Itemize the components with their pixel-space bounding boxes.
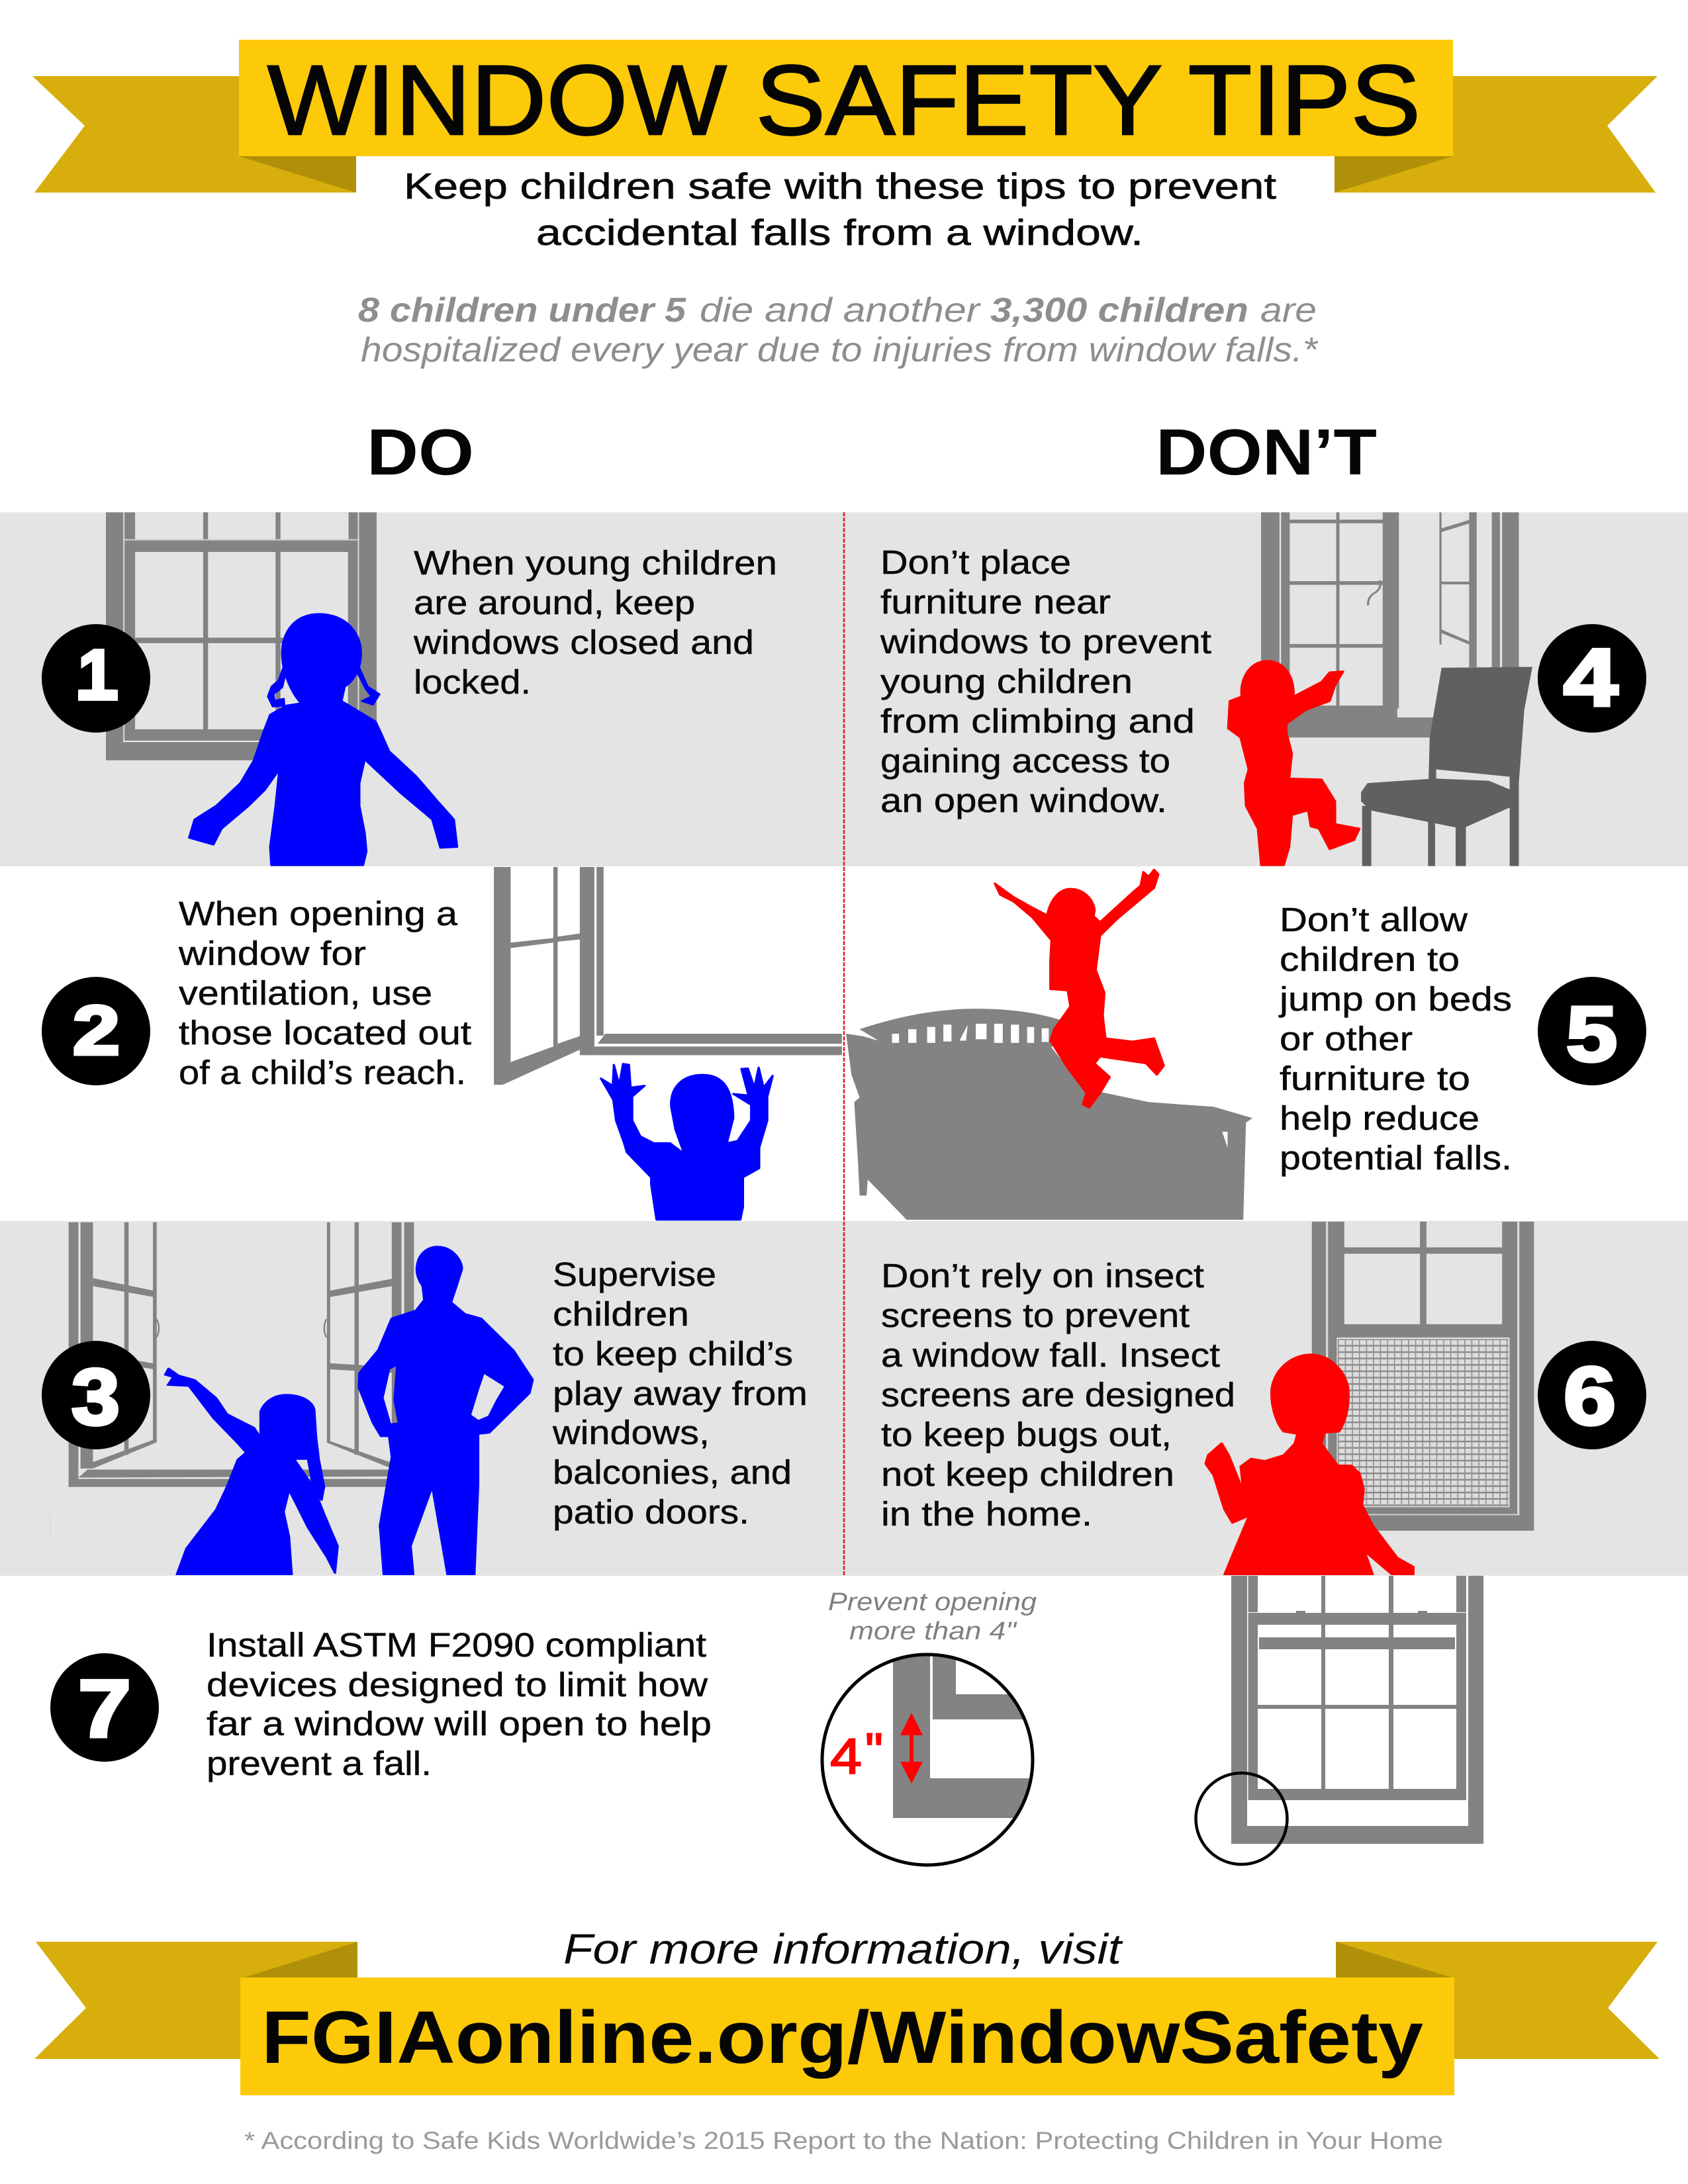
label: 4 inches: 4 — [830, 1729, 862, 1785]
tip 1 text — [413, 544, 777, 701]
tip 2 text: of a child’s reach. — [179, 1054, 466, 1091]
caption: prevent opening — [828, 1588, 1037, 1645]
tip 7 text: Install ASTM F2090 compliant — [207, 1626, 706, 1664]
silhouette: adult standing — [359, 1246, 533, 1574]
tip 5 text: or other — [1280, 1020, 1413, 1058]
panel: tip 2 — [42, 867, 842, 1220]
tip 1 text: When young children — [414, 544, 777, 582]
tip 6 text: a window fall. Insect — [881, 1336, 1220, 1374]
number badge 2 — [42, 977, 150, 1085]
window: with insect screen — [1312, 1222, 1534, 1531]
tip 4 text: from climbing and — [880, 702, 1195, 740]
tip 3 text: children — [553, 1295, 689, 1333]
statistic text: hospitalized every year due to injuries from window falls.* — [361, 331, 1319, 369]
subtitle — [404, 165, 1276, 253]
tip 3 text: to keep child’s — [553, 1335, 793, 1373]
tip 5 text — [1278, 901, 1512, 1177]
title: WINDOW SAFETY TIPS — [267, 44, 1421, 156]
number badge 6 — [1538, 1341, 1646, 1449]
tip 3 text: balconies, and — [553, 1453, 792, 1491]
window: open double casement — [69, 1222, 414, 1487]
tip 2 text: When opening a — [179, 895, 458, 933]
caption: prevent opening: Prevent opening — [828, 1588, 1037, 1616]
call to action line: For more information, visit — [563, 1925, 1123, 1973]
tip 7 text: far a window will open to help — [207, 1705, 712, 1743]
number badge 3 — [42, 1341, 150, 1449]
statistic text: 8 children under 5 — [358, 291, 686, 330]
tip 6 text — [881, 1257, 1235, 1533]
statistic text — [358, 291, 1319, 369]
number badge 7 — [50, 1653, 159, 1762]
top ribbon banner with title — [32, 40, 1658, 193]
panel: tip 4 — [844, 512, 1688, 866]
caption: prevent opening: more than 4" — [849, 1617, 1017, 1645]
panel: tip 5 — [846, 870, 1646, 1220]
tip 3 text: play away from — [553, 1375, 808, 1412]
window: open with swing sash — [1261, 512, 1519, 737]
number badge 4 — [1538, 624, 1646, 733]
window: closed sash — [106, 512, 377, 760]
tip 4 text — [880, 543, 1211, 819]
bed — [846, 1009, 1252, 1220]
tip 4 text: Don’t place — [880, 543, 1071, 581]
tip 7 text — [207, 1626, 712, 1782]
tip 2 text — [178, 895, 471, 1091]
number badge 1 — [42, 624, 150, 733]
tip 5 text: help reduce — [1280, 1099, 1479, 1137]
bottom ribbon banner with URL — [34, 1942, 1660, 2095]
number badge 1: 1 — [78, 636, 115, 713]
tip 4 text: windows to prevent — [880, 623, 1211, 660]
tip 4 text: young children — [880, 662, 1133, 700]
silhouette: child at screen — [1205, 1354, 1413, 1574]
number badge 3: 3 — [71, 1353, 120, 1441]
tip 2 text: ventilation, use — [179, 974, 432, 1012]
number badge 6: 6 — [1564, 1351, 1616, 1442]
tip 7 text: devices designed to limit how — [207, 1666, 708, 1704]
subtitle: accidental falls from a window. — [536, 212, 1143, 253]
silhouette: girl reaching — [165, 1368, 338, 1574]
tip 1 text: are around, keep — [414, 584, 695, 621]
website URL: FGIAonline.org/WindowSafety — [261, 1996, 1423, 2079]
tip 3 text — [552, 1255, 808, 1531]
detail circle: 4 inch opening — [822, 1648, 1045, 1865]
statistic text: 3,300 children — [990, 291, 1248, 330]
panel: tip 3 — [0, 1221, 844, 1576]
tip 3 text: patio doors. — [553, 1493, 749, 1531]
tip 6 text: Don’t rely on insect — [881, 1257, 1204, 1295]
tip 1 text: windows closed and — [413, 623, 754, 661]
number badge 2: 2 — [73, 992, 120, 1069]
tip 3 text: Supervise — [553, 1255, 716, 1293]
number badge 5 — [1538, 977, 1646, 1085]
tip 6 text: screens to prevent — [881, 1297, 1190, 1334]
tip 4 text: gaining access to — [880, 742, 1170, 780]
tip 5 text: Don’t allow — [1280, 901, 1468, 938]
statistic text: are — [1260, 291, 1317, 330]
silhouette: girl with braids — [189, 614, 457, 865]
label: 4 inches — [830, 1723, 883, 1785]
silhouette: toddler climbing — [1228, 661, 1360, 865]
tip 6 text: to keep bugs out, — [881, 1416, 1172, 1453]
tip 5 text: children to — [1280, 940, 1460, 978]
number badge 7: 7 — [78, 1664, 131, 1754]
window: limited opening — [1231, 1576, 1483, 1844]
heading: DON'T: DON’T — [1156, 416, 1377, 488]
tip 5 text: jump on beds — [1278, 980, 1512, 1018]
number badge 5: 5 — [1566, 991, 1617, 1078]
tip 6 text: not keep children — [881, 1455, 1174, 1493]
silhouette: boy reaching up — [601, 1064, 773, 1220]
window: open casement above reach — [494, 867, 842, 1085]
tip 4 text: furniture near — [880, 583, 1111, 621]
heading: DO: DO — [367, 416, 474, 488]
tip 5 text: potential falls. — [1280, 1139, 1512, 1177]
tip 6 text: screens are designed — [881, 1376, 1235, 1414]
tip 1 text: locked. — [414, 663, 531, 701]
tip 4 text: an open window. — [880, 782, 1167, 819]
panel: tip 1 — [0, 512, 844, 866]
number badge 4: 4 — [1564, 633, 1618, 723]
statistic text: die and another — [700, 291, 982, 330]
tip 2 text: those located out — [179, 1014, 471, 1052]
tip 2 text: window for — [178, 934, 366, 972]
small locator circle — [1196, 1773, 1287, 1864]
panel: tip 6 — [844, 1221, 1688, 1576]
tip 6 text: in the home. — [881, 1495, 1092, 1533]
tip 5 text: furniture to — [1280, 1060, 1470, 1097]
subtitle: Keep children safe with these tips to prevent — [404, 165, 1276, 206]
tip 3 text: windows, — [552, 1414, 710, 1451]
red arrow — [900, 1713, 923, 1784]
footnote: * According to Safe Kids Worldwide’s 2015 Report to the Nation: Protecting Children in Your Home — [244, 2127, 1443, 2154]
panel: tip 7 — [50, 1576, 1483, 1865]
label: 4 inches: " — [865, 1723, 883, 1780]
silhouette: child jumping — [995, 870, 1164, 1108]
chair — [1361, 667, 1532, 866]
tip 7 text: prevent a fall. — [207, 1745, 432, 1782]
